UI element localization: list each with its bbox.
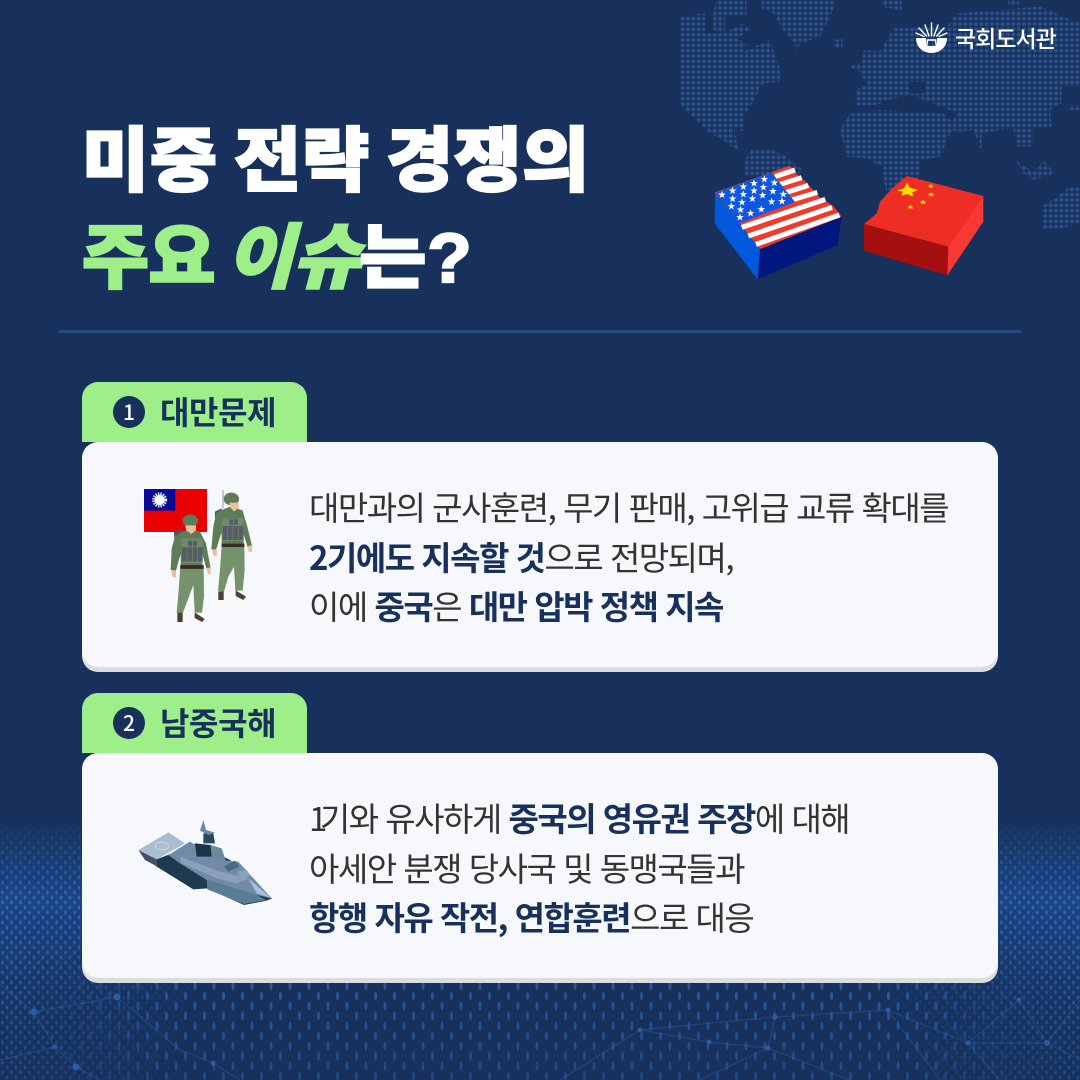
panel: South China Sea issue <box>82 693 998 983</box>
US flag block: ★ <box>779 189 788 200</box>
card: South China Sea <box>82 753 998 978</box>
US flag block: ★ <box>736 213 745 224</box>
US flag block: ★ <box>748 194 757 205</box>
text: Taiwan description: 대만과의 군사훈련, 무기 판매, 고위급 교류 확대를 <box>309 482 948 530</box>
logo: National Assembly Library <box>915 22 1056 53</box>
text: South China Sea description: 항행 자유 작전, 연합훈련으로 대응 <box>309 892 753 940</box>
tab: South China Sea heading: 남중국해 <box>160 706 276 742</box>
tab: Taiwan heading: 대만문제 <box>160 395 276 431</box>
US flag block <box>715 166 842 279</box>
US flag block: ★ <box>767 197 776 208</box>
text: South China Sea description <box>309 793 849 940</box>
US flag block: ★ <box>739 182 748 193</box>
US flag block: ★ <box>757 205 766 216</box>
logo emblem <box>915 22 948 53</box>
panel: Taiwan issue <box>82 382 998 672</box>
US flag block: ★ <box>727 201 736 212</box>
US flag block: ★ <box>760 175 769 186</box>
title: 주요 이슈는? <box>82 219 473 297</box>
title: 미중 전략 경쟁의 <box>82 122 590 200</box>
icon: Taiwan flag and soldiers <box>144 489 252 622</box>
tab: Taiwan heading <box>82 382 307 442</box>
US flag block: ★ <box>738 197 747 208</box>
US flag block: ★ <box>746 209 755 220</box>
card: Taiwan <box>82 442 998 667</box>
US flag block: ★ <box>750 178 759 189</box>
icon: warship <box>138 820 272 905</box>
US flag block: ★ <box>759 183 768 194</box>
US flag block: ★ <box>736 205 745 216</box>
text: South China Sea description: 1기와 유사하게 중국의 영유권 주장에 대해 <box>309 793 849 841</box>
US flag block: ★ <box>739 189 748 200</box>
tab: South China Sea heading: 2 <box>123 708 135 738</box>
text: Taiwan description <box>309 482 948 629</box>
US flag block: ★ <box>769 186 778 197</box>
tab: Taiwan heading: 1 <box>123 397 135 427</box>
logo wordmark: 국회도서관 <box>955 26 1056 52</box>
China flag block <box>864 176 983 275</box>
US flag block: ★ <box>750 186 759 197</box>
US flag block: ★ <box>758 190 767 201</box>
divider <box>59 330 1021 333</box>
US flag block: ★ <box>778 197 787 208</box>
icon: US and China flag blocks <box>714 166 984 280</box>
US flag block: ★ <box>718 190 727 201</box>
text: South China Sea description: 아세안 분쟁 당사국 및 동맹국들과 <box>309 842 744 890</box>
title <box>82 122 590 297</box>
US flag block: ★ <box>728 194 737 205</box>
text: Taiwan description: 2기에도 지속할 것으로 전망되며, <box>309 532 733 580</box>
US flag block: ★ <box>728 186 737 197</box>
text: Taiwan description: 이에 중국은 대만 압박 정책 지속 <box>309 581 723 629</box>
tab: South China Sea heading <box>82 693 307 753</box>
US flag block: ★ <box>770 178 779 189</box>
